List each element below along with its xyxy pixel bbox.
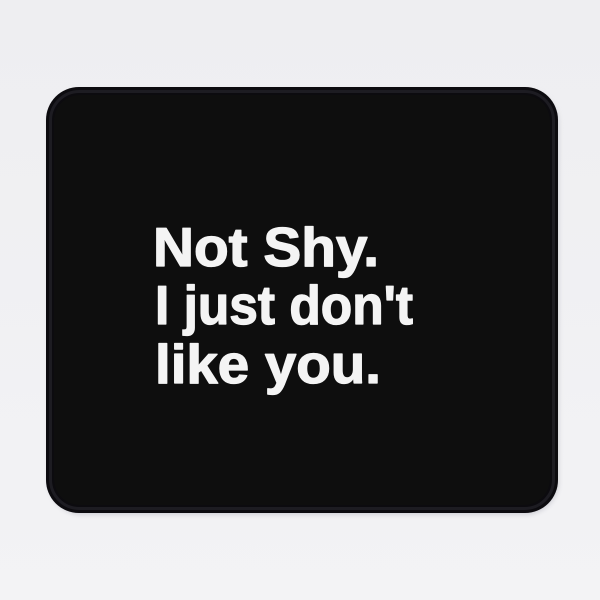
slogan text: like you. xyxy=(155,333,381,395)
slogan text: Not Shy. xyxy=(153,216,379,278)
slogan text: I just don't xyxy=(155,274,413,336)
slogan text xyxy=(153,216,413,395)
mouse mat xyxy=(46,87,559,515)
